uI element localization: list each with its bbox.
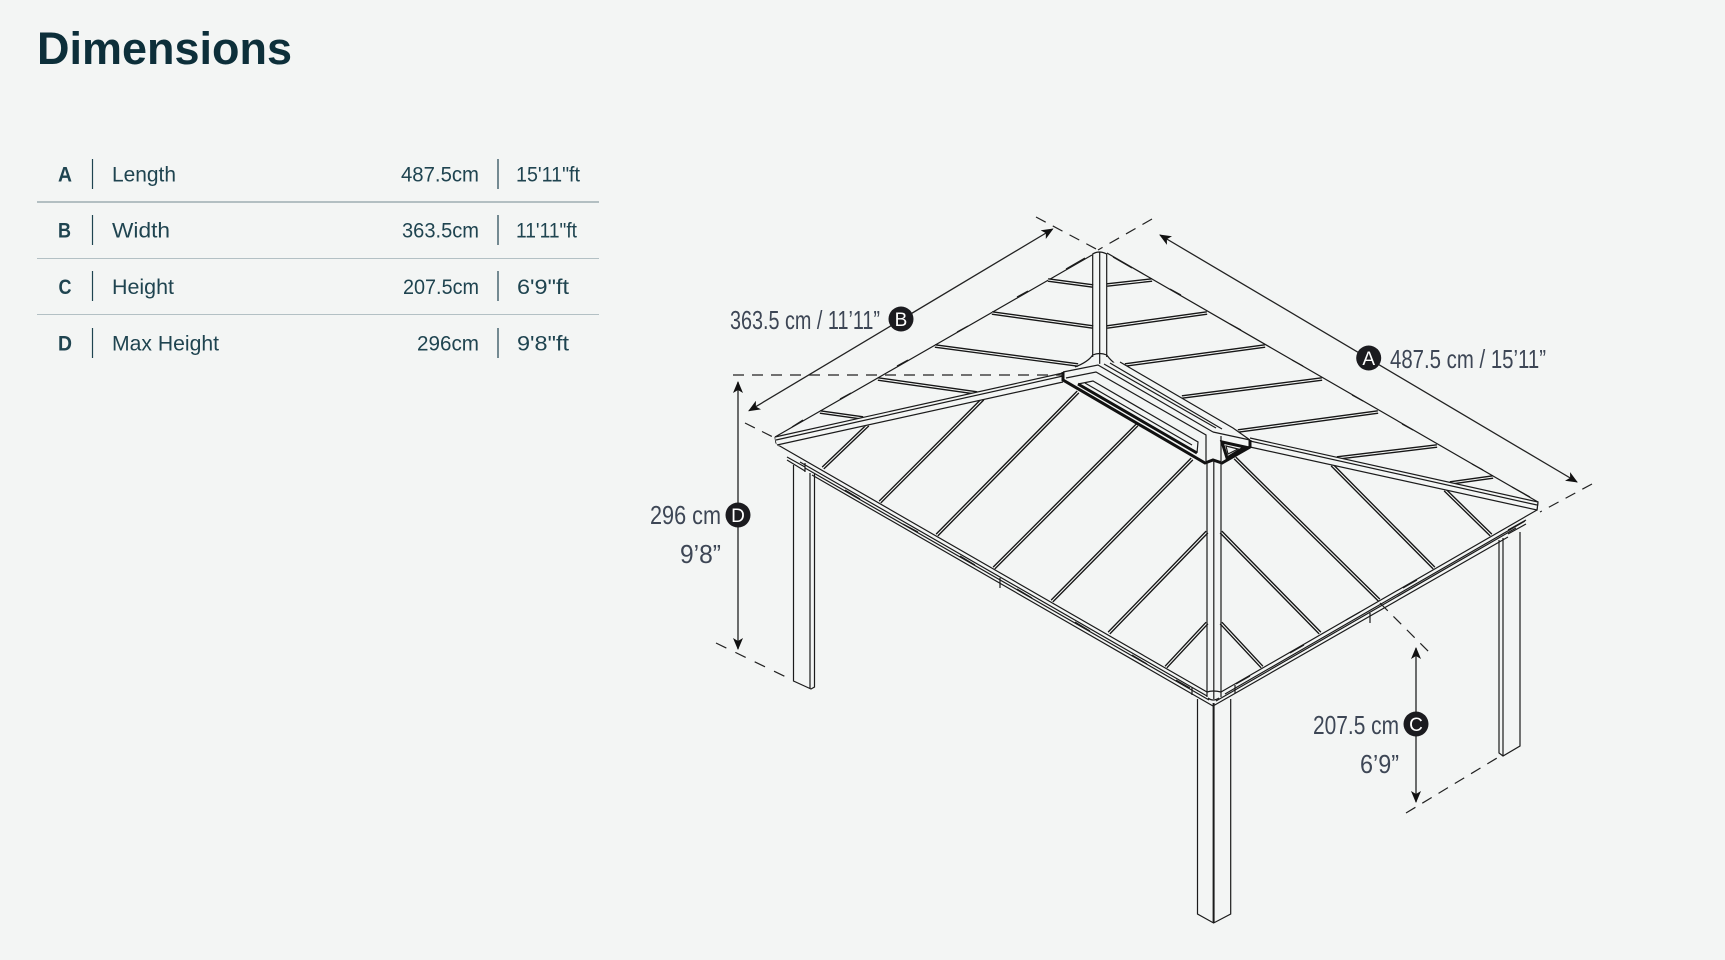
- callout B: width: 363.5 cm / 11’11”: [730, 305, 880, 335]
- row C: height: 207.5cm: [403, 276, 479, 299]
- row A: length: 487.5cm: [401, 164, 479, 187]
- roof panel ribs: back slopes: [820, 280, 1493, 483]
- callout D: max height: 296 cm: [650, 500, 721, 530]
- row B: width: 11'11"ft: [516, 220, 577, 243]
- hip rails: [775, 373, 1538, 510]
- callout D: max height: D: [731, 506, 745, 527]
- callout D: max height: [650, 500, 750, 569]
- gazebo line drawing: [775, 252, 1538, 923]
- row D: max height: Max Height: [112, 333, 219, 356]
- roof panel ribs: front slopes: [823, 392, 1491, 667]
- row B: width: B: [58, 220, 71, 243]
- row A: length: Length: [112, 164, 176, 187]
- callout C: height: 207.5 cm: [1313, 710, 1399, 740]
- back hip post: [1075, 252, 1117, 367]
- row C: height: Height: [112, 276, 174, 299]
- row B: width: [58, 215, 577, 245]
- callout C: height: [1313, 710, 1428, 779]
- callout A: length: 487.5 cm / 15’11”: [1390, 344, 1546, 374]
- row C: height: 6'9"ft: [517, 276, 569, 299]
- posts: [794, 465, 1520, 923]
- callout A: length: A: [1362, 349, 1375, 370]
- row D: max height: 296cm: [417, 333, 479, 356]
- row D: max height: [58, 328, 569, 358]
- callout D: max height: 9’8”: [680, 539, 721, 569]
- row D: max height: D: [58, 333, 72, 356]
- dimensions table: [37, 159, 599, 358]
- callout C: height: C: [1409, 715, 1423, 736]
- row A: length: A: [58, 164, 72, 187]
- callout B: width: B: [895, 310, 907, 331]
- row C: height: C: [58, 276, 72, 299]
- callout C: height: 6’9”: [1360, 749, 1399, 779]
- row A: length: 15'11"ft: [516, 164, 580, 187]
- roof back edges: [775, 253, 1538, 502]
- row B: width: Width: [112, 220, 170, 243]
- row C: height: [58, 271, 569, 301]
- title: Dimensions: [37, 23, 292, 74]
- callout A: length: [1356, 344, 1546, 374]
- row D: max height: 9'8"ft: [517, 333, 569, 356]
- row B: width: 363.5cm: [402, 220, 479, 243]
- row A: length: [58, 159, 580, 189]
- ridge cap: [1063, 362, 1250, 699]
- dimension lines: [716, 217, 1592, 813]
- eaves: [775, 437, 1538, 706]
